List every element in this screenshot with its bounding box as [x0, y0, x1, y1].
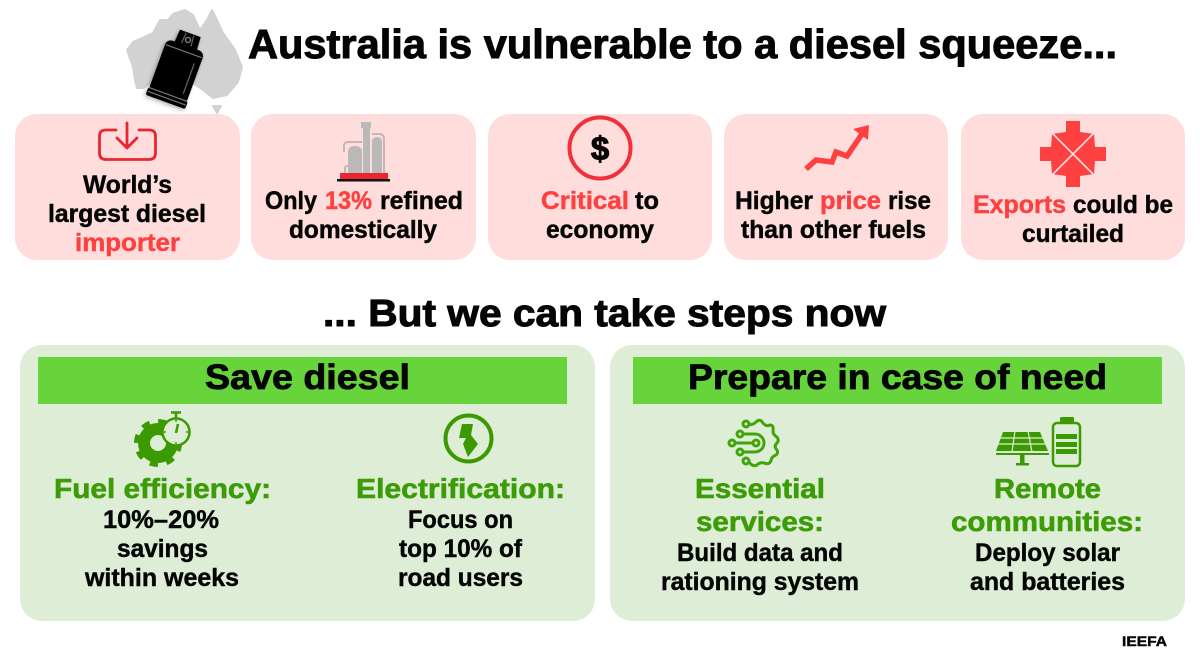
text: critical to economy: to	[635, 187, 659, 215]
text: remote communities: Remote	[994, 473, 1101, 504]
icon: gear with stopwatch	[137, 412, 190, 464]
icon: download tray	[100, 123, 156, 160]
header: prepare in case of need	[633, 357, 1162, 404]
panel: world's largest importer	[15, 114, 240, 260]
heading: but we can take steps now: ... But we can take steps now	[323, 293, 886, 335]
text: fuel efficiency: within weeks	[84, 564, 239, 592]
text: exports could be curtailed: curtailed	[1022, 220, 1124, 248]
text: fuel efficiency	[54, 473, 271, 592]
text: exports could be curtailed: Exports	[973, 191, 1066, 219]
text: higher price rise than other fuels: Higher	[735, 187, 813, 215]
panel: higher price rise	[724, 114, 948, 260]
icon: refinery	[337, 122, 390, 182]
text: electrification	[356, 473, 565, 592]
text: fuel efficiency: savings	[117, 535, 208, 563]
source label: IEEFA	[1122, 633, 1167, 649]
text: higher price rise than other fuels: than other fuels	[741, 216, 926, 244]
header: save diesel	[38, 357, 567, 404]
text: critical to economy: Critical	[541, 187, 629, 215]
panel: exports curtailed	[961, 114, 1185, 260]
text: only 13% refined domestically: 13%	[325, 187, 372, 215]
text: remote communities: communities:	[951, 506, 1143, 537]
text: higher price rise than other fuels	[735, 187, 931, 244]
text: higher price rise than other fuels: rise	[888, 187, 931, 215]
text: world's largest diesel importer: World’s	[83, 171, 172, 199]
text: only 13% refined domestically: domestically	[289, 216, 437, 244]
text: remote communities: and batteries	[970, 568, 1125, 596]
title: Australia is vulnerable to a diesel squeeze...	[248, 21, 1117, 67]
text: electrification: road users	[398, 564, 523, 592]
text: world's largest diesel importer: importer	[75, 229, 180, 257]
text: essential services: services:	[696, 506, 824, 537]
text: essential services: rationing system	[661, 568, 859, 596]
panel: critical to economy	[488, 114, 712, 260]
text: only 13% refined domestically	[265, 187, 463, 244]
text: essential services	[661, 473, 859, 596]
text: only 13% refined domestically: Only	[265, 187, 317, 215]
text: exports could be curtailed	[973, 191, 1173, 248]
text: fuel efficiency: Fuel efficiency:	[54, 473, 271, 504]
text: electrification: Electrification:	[356, 473, 565, 504]
text: electrification: top 10% of	[399, 535, 523, 563]
text: essential services: Essential	[695, 473, 825, 504]
icon: rising arrow	[806, 125, 869, 169]
panel: prepare in case of need	[610, 345, 1185, 621]
icon: blocked arrows cross	[1040, 121, 1106, 187]
icon: dollar coin	[570, 118, 630, 178]
text: electrification: Focus on	[408, 506, 513, 534]
text: fuel efficiency: 10%–20%	[103, 506, 219, 534]
text: higher price rise than other fuels: price	[820, 187, 881, 215]
icon: lightning bolt in circle	[446, 416, 492, 462]
text: remote communities: Deploy solar	[975, 539, 1120, 567]
header: prepare in case of need: Prepare in case of need	[688, 358, 1107, 397]
panel: 13% refined	[251, 114, 476, 260]
text: world's largest diesel importer: largest diesel	[48, 200, 206, 228]
text: critical to economy	[541, 187, 659, 244]
text: essential services: Build data and	[677, 539, 843, 567]
text: exports could be curtailed: could be	[1073, 191, 1173, 219]
icon: circuit gear	[729, 420, 778, 466]
panel: save diesel	[20, 345, 595, 621]
text: critical to economy: economy	[546, 216, 654, 244]
header: save diesel: Save diesel	[205, 358, 410, 397]
text: only 13% refined domestically: refined	[380, 187, 463, 215]
text: world's largest diesel importer	[48, 171, 206, 257]
text: remote communities	[951, 473, 1143, 596]
icon: dollar coin: $	[591, 130, 609, 167]
icon: Australia map with gas cylinder	[127, 10, 242, 113]
icon: solar panel and battery	[996, 417, 1080, 466]
